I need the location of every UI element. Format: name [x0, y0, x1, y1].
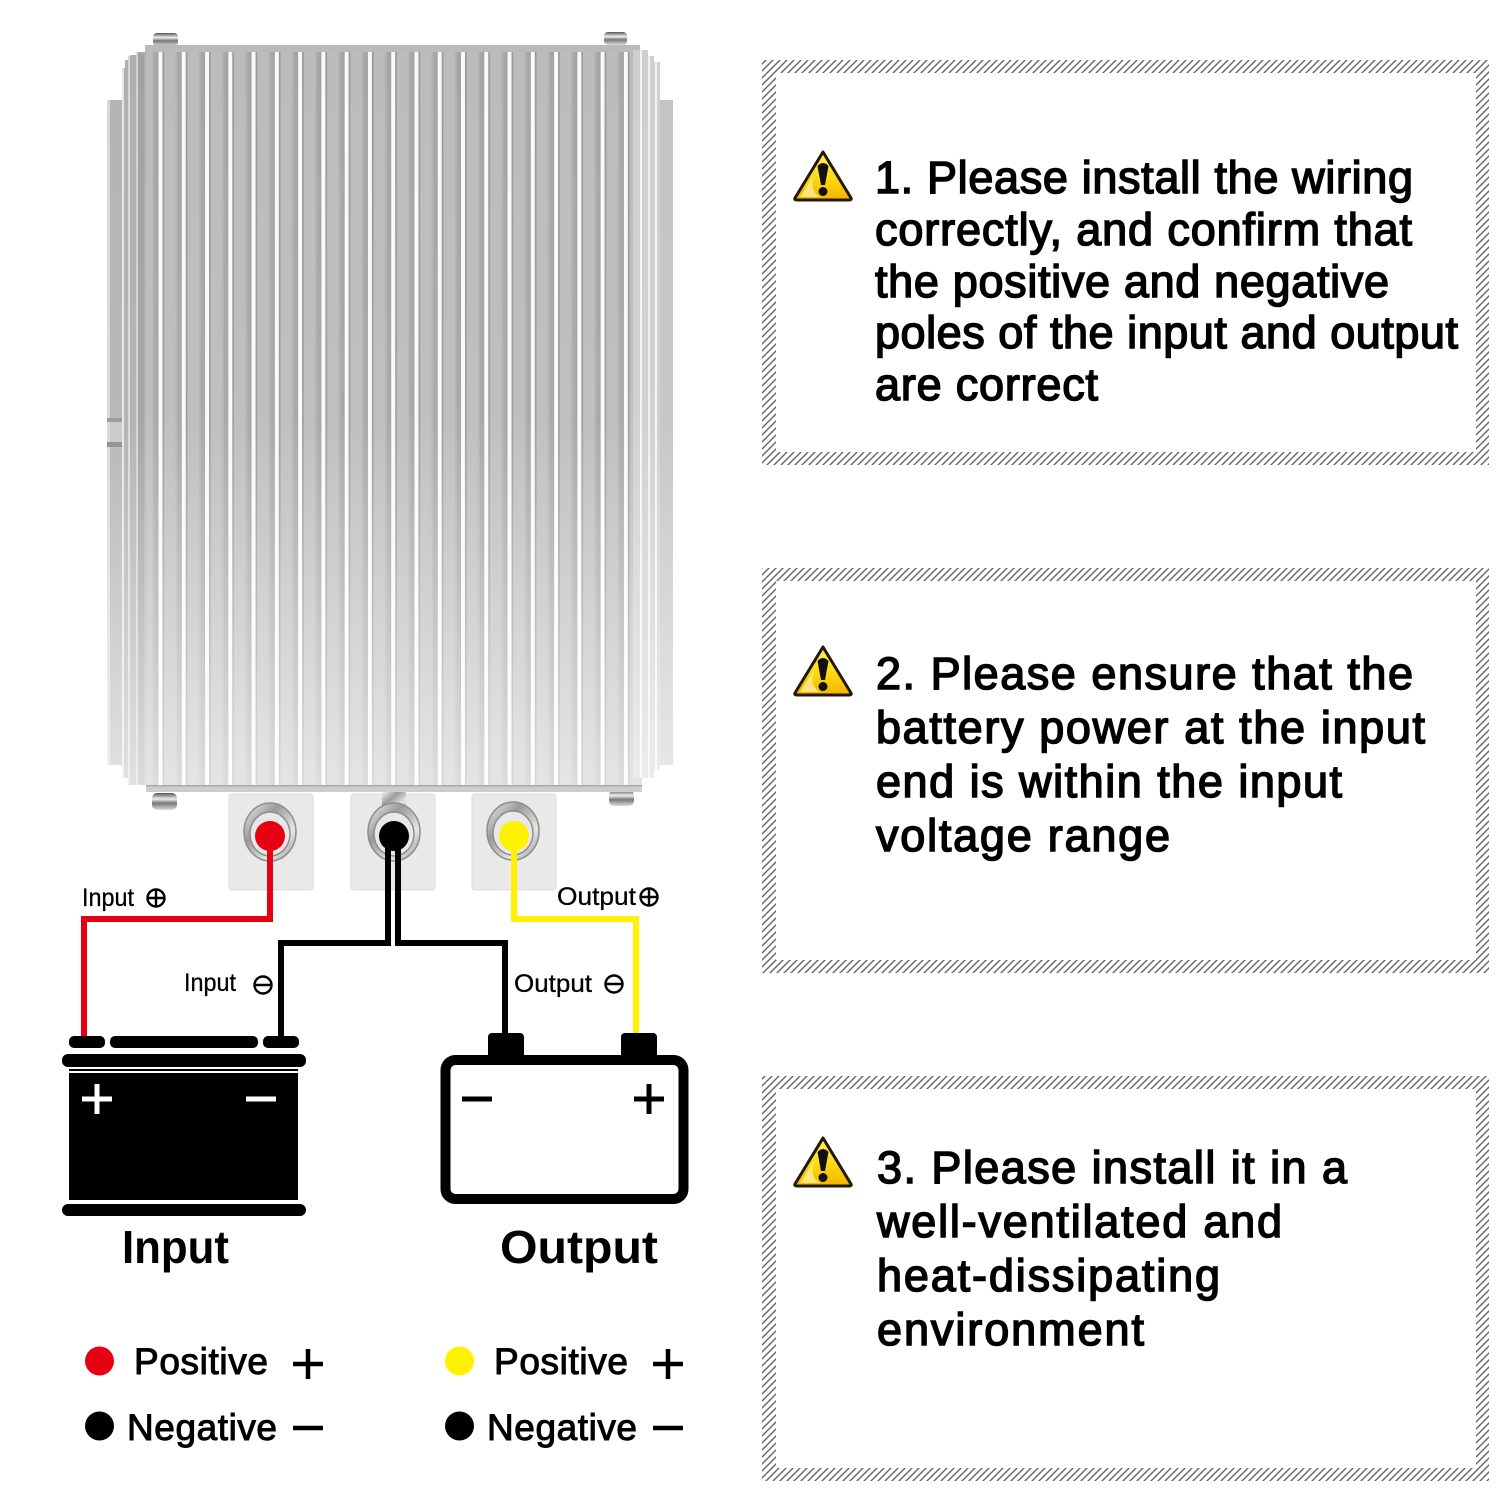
wire labels: Input: [184, 969, 236, 997]
note 1 text: 1. Please install the wiring: [875, 152, 1413, 203]
legend: output: [445, 1341, 683, 1448]
note 1 text: poles of the input and output: [875, 307, 1458, 358]
note 1 text: are correct: [875, 359, 1098, 410]
panel: note 2: [762, 568, 1489, 973]
note 3 text: [876, 1142, 1348, 1355]
bottom mounting screws: [152, 790, 634, 810]
wire labels: Output: [514, 970, 592, 998]
yellow wire: [514, 835, 636, 1036]
wire labels: [82, 883, 658, 998]
note 1 text: [875, 152, 1458, 410]
terminal caps: [255, 821, 529, 851]
note 3 text: environment: [877, 1304, 1144, 1355]
note 3 text: 3. Please install it in a: [877, 1142, 1348, 1193]
note 2 text: end is within the input: [876, 756, 1342, 807]
battery titles: Input: [122, 1221, 229, 1273]
legend: output: Negative: [487, 1407, 637, 1448]
note 1 text: correctly, and confirm that: [875, 204, 1412, 255]
legend: input: Positive: [134, 1341, 268, 1382]
note 2 text: [876, 648, 1425, 861]
black terminal stud: [382, 792, 406, 812]
note 2 text: battery power at the input: [876, 702, 1425, 753]
output battery: [446, 1033, 684, 1199]
terminal plates: [229, 794, 556, 890]
red wire: [84, 835, 270, 1037]
icon: warning triangle 3: [795, 1138, 851, 1186]
note 1 text: the positive and negative: [875, 256, 1389, 307]
top mounting screws: [153, 32, 627, 46]
converter unit: [107, 32, 673, 890]
panel: note 1: [762, 60, 1489, 465]
panel: note 3: [762, 1076, 1489, 1481]
note 3 text: heat-dissipating: [877, 1250, 1220, 1301]
note 3 text: well-ventilated and: [876, 1196, 1282, 1247]
battery titles: Output: [500, 1221, 658, 1273]
wire labels: Output: [557, 883, 636, 911]
icon: warning triangle 1: [795, 152, 851, 200]
legend: output: Positive: [494, 1341, 628, 1382]
battery titles: [122, 1221, 658, 1273]
terminal nuts: [244, 802, 539, 861]
input battery: [62, 1036, 306, 1216]
legend: input: [85, 1341, 323, 1448]
wiring: [84, 835, 636, 1037]
note 2 text: 2. Please ensure that the: [876, 648, 1413, 699]
wire labels: Input: [82, 884, 134, 912]
legend: input: Negative: [127, 1407, 277, 1448]
side brackets: [107, 100, 673, 765]
heat sink body: [107, 45, 673, 792]
note 2 text: voltage range: [876, 810, 1170, 861]
icon: warning triangle 2: [795, 647, 851, 695]
black wires: [281, 835, 505, 1037]
